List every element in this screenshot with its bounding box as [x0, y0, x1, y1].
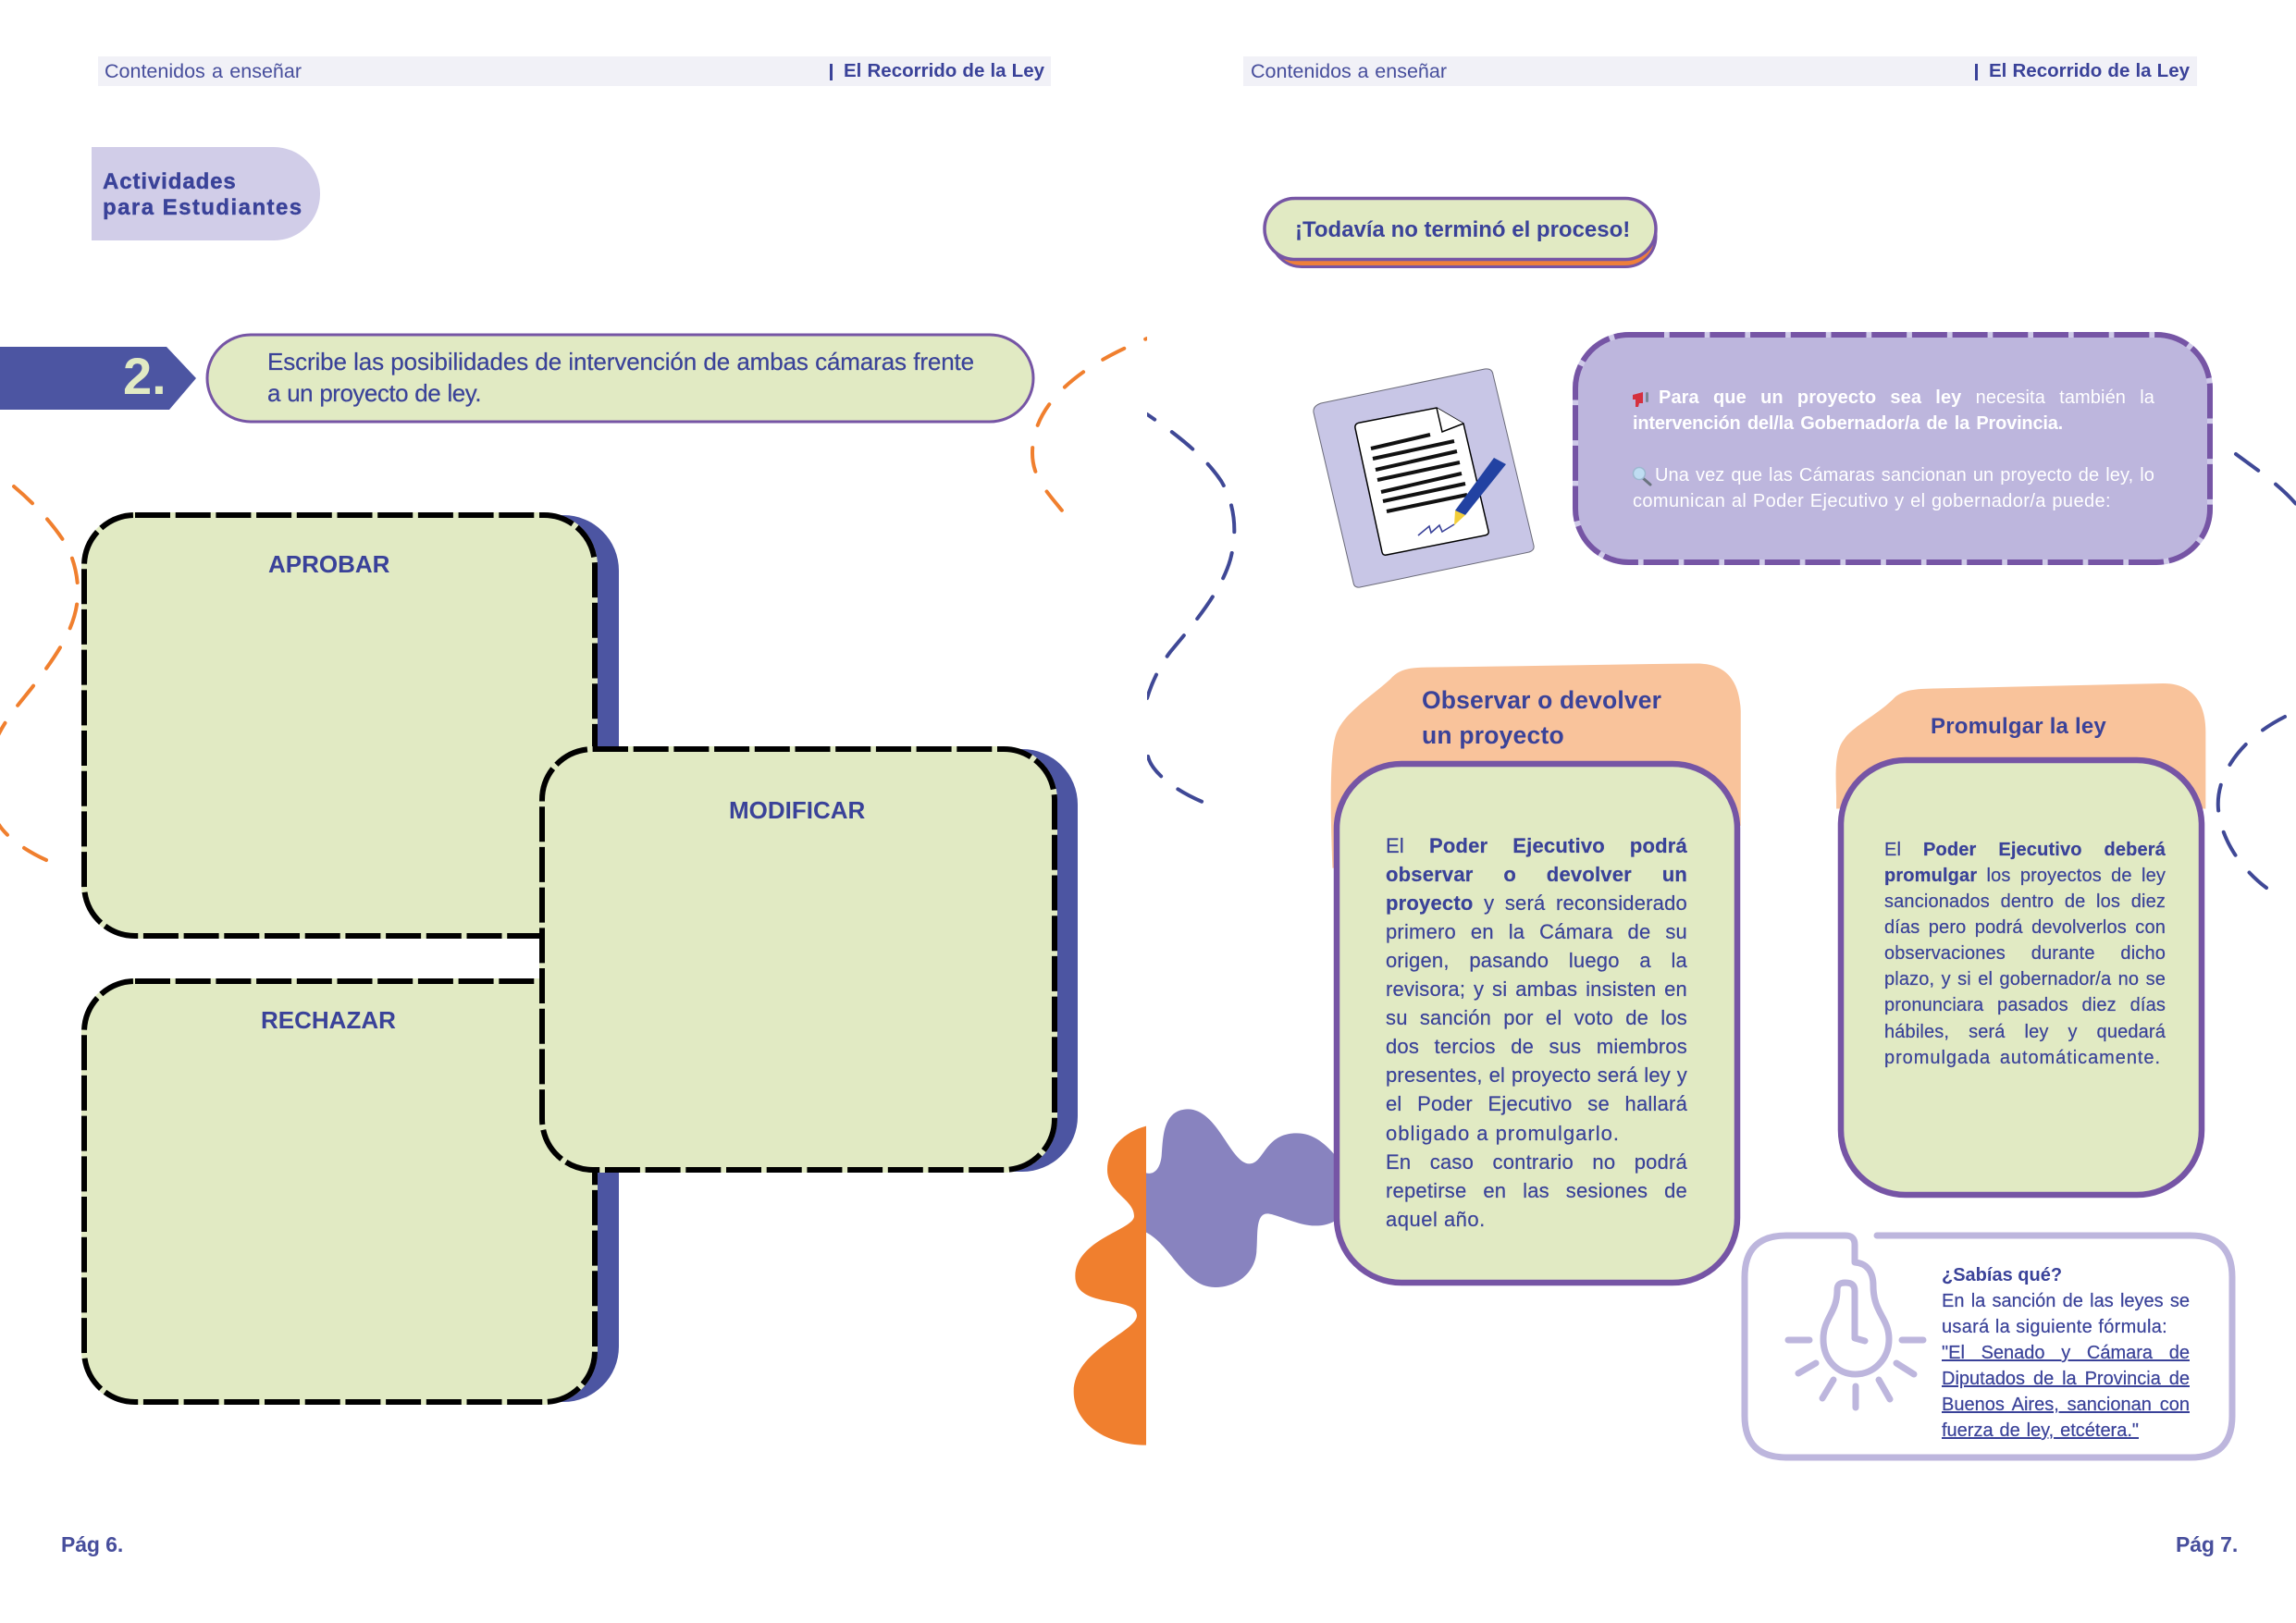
sabías text: usará la siguiente fórmula:: [1942, 1317, 2167, 1337]
panel body text: promulgada automáticamente.: [1884, 1048, 2161, 1068]
panel body text: proyecto y será reconsiderado: [1386, 891, 1687, 915]
panel body text: [1884, 840, 2166, 1068]
panel body text: sancionados dentro de los diez: [1884, 891, 2166, 912]
icon: magnifier: [1632, 466, 1652, 486]
blue dashed curve, gutter: [1147, 414, 1234, 803]
panel body text: aquel año.: [1386, 1208, 1486, 1231]
blue dashed curve, right edge top: [2236, 454, 2296, 504]
decorative shapes and dashed curves: [0, 337, 2296, 1445]
panel: observar o devolver: [1330, 664, 1741, 1285]
number marker 2: [0, 347, 196, 410]
panel: modificar: [539, 746, 1078, 1173]
panel: sabías qué: [1741, 1232, 2235, 1461]
icon: megaphone: [1633, 392, 1648, 407]
number: 2.: [123, 347, 167, 405]
header: right page: [1243, 56, 2197, 86]
page number 6: Pág 6.: [61, 1532, 123, 1556]
sabías text: fuerza de ley, etcétera.": [1942, 1420, 2139, 1441]
tag: actividades para estudiantes: [92, 147, 320, 240]
rechazar label: RECHAZAR: [261, 1006, 396, 1034]
header divider: [830, 64, 833, 80]
panel body text: obligado a promulgarlo.: [1386, 1122, 1620, 1145]
header document title: El Recorrido de la Ley: [1989, 60, 2190, 81]
page number 7: Pág 7.: [2176, 1532, 2238, 1556]
sabías heading: ¿Sabías qué?: [1942, 1265, 2062, 1285]
sabías text: "El Senado y Cámara de: [1942, 1343, 2190, 1363]
aprobar label: APROBAR: [268, 550, 389, 578]
orange blob: [1074, 1126, 1146, 1445]
panel title: Observar o devolver: [1422, 686, 1661, 714]
panel body text: pronunciara pasados diez días: [1884, 995, 2166, 1015]
orange dashed curve, left edge: [0, 486, 78, 860]
panel body text: observar o devolver un: [1386, 863, 1687, 886]
sabías text: [1942, 1291, 2190, 1441]
panel body text: dos tercios de sus miembros: [1386, 1035, 1687, 1058]
callout paragraph 1 line 2: intervención del/la Gobernador/a de la Provincia.: [1633, 413, 2063, 434]
orange dashed curve, gutter: [1032, 338, 1147, 510]
panel title: Promulgar la ley: [1931, 714, 2106, 739]
tag line 2: para Estudiantes: [103, 195, 303, 220]
panel body text: su sanción por el voto de los: [1386, 1006, 1687, 1029]
panel body text: El Poder Ejecutivo deberá: [1884, 840, 2166, 860]
sabías text: Buenos Aires, sancionan con: [1942, 1395, 2190, 1415]
instruction text line 1: Escribe las posibilidades de intervención de ambas cámaras frente: [267, 348, 974, 375]
panel body text: origen, pasando luego a la: [1386, 949, 1687, 972]
callout paragraph 2 line 2: comunican al Poder Ejecutivo y el gobernador/a puede:: [1633, 491, 2111, 511]
panel body text: promulgar los proyectos de ley: [1884, 866, 2166, 886]
tag line 1: Actividades: [103, 169, 237, 194]
header document title: El Recorrido de la Ley: [844, 60, 1044, 81]
instruction pill: [205, 333, 1034, 424]
instruction text line 2: a un proyecto de ley.: [267, 379, 481, 407]
panel body text: revisora; y si ambas insisten en: [1386, 977, 1687, 1001]
panel body text: plazo, y si el gobernador/a no se: [1884, 969, 2166, 990]
header section name: Contenidos a enseñar: [105, 60, 302, 82]
panel: callout gobernador: [1573, 332, 2213, 565]
sabías text: Diputados de la Provincia de: [1942, 1369, 2190, 1389]
panel body text: primero en la Cámara de su: [1386, 920, 1687, 943]
icon: light bulb with frame: [1741, 1232, 2235, 1461]
panel body text: [1386, 834, 1687, 1231]
panel body text: El Poder Ejecutivo podrá: [1386, 834, 1687, 857]
panel: aprobar: [81, 512, 619, 939]
heading text: ¡Todavía no terminó el proceso!: [1295, 217, 1630, 242]
modificar label: MODIFICAR: [729, 796, 865, 824]
panel body text: hábiles, será ley y quedará: [1884, 1022, 2166, 1042]
header divider: [1975, 64, 1978, 80]
sabías text: En la sanción de las leyes se: [1942, 1291, 2190, 1311]
panel body text: observaciones durante dicho: [1884, 943, 2166, 964]
blue dashed curve, right edge middle: [2218, 717, 2285, 888]
callout paragraph 2 line 1: Una vez que las Cámaras sancionan un proyecto de ley, lo: [1655, 465, 2154, 486]
panel body text: En caso contrario no podrá: [1386, 1150, 1687, 1174]
purple blob: [1146, 1109, 1339, 1287]
callout paragraph 1 line 1: Para que un proyecto sea ley necesita también la: [1659, 387, 2154, 408]
panel body text: presentes, el proyecto será ley y: [1386, 1064, 1687, 1087]
panel body text: días pero podrá devolverlos con: [1884, 917, 2166, 938]
panel: promulgar la ley: [1835, 683, 2205, 1199]
panel body text: el Poder Ejecutivo se hallará: [1386, 1092, 1687, 1115]
header section name: Contenidos a enseñar: [1251, 60, 1447, 82]
header: left page: [98, 56, 1051, 86]
heading pill: [1263, 196, 1658, 268]
panel: rechazar: [81, 978, 619, 1405]
panel body text: repetirse en las sesiones de: [1386, 1179, 1687, 1202]
panel title line 2: un proyecto: [1422, 721, 1564, 749]
